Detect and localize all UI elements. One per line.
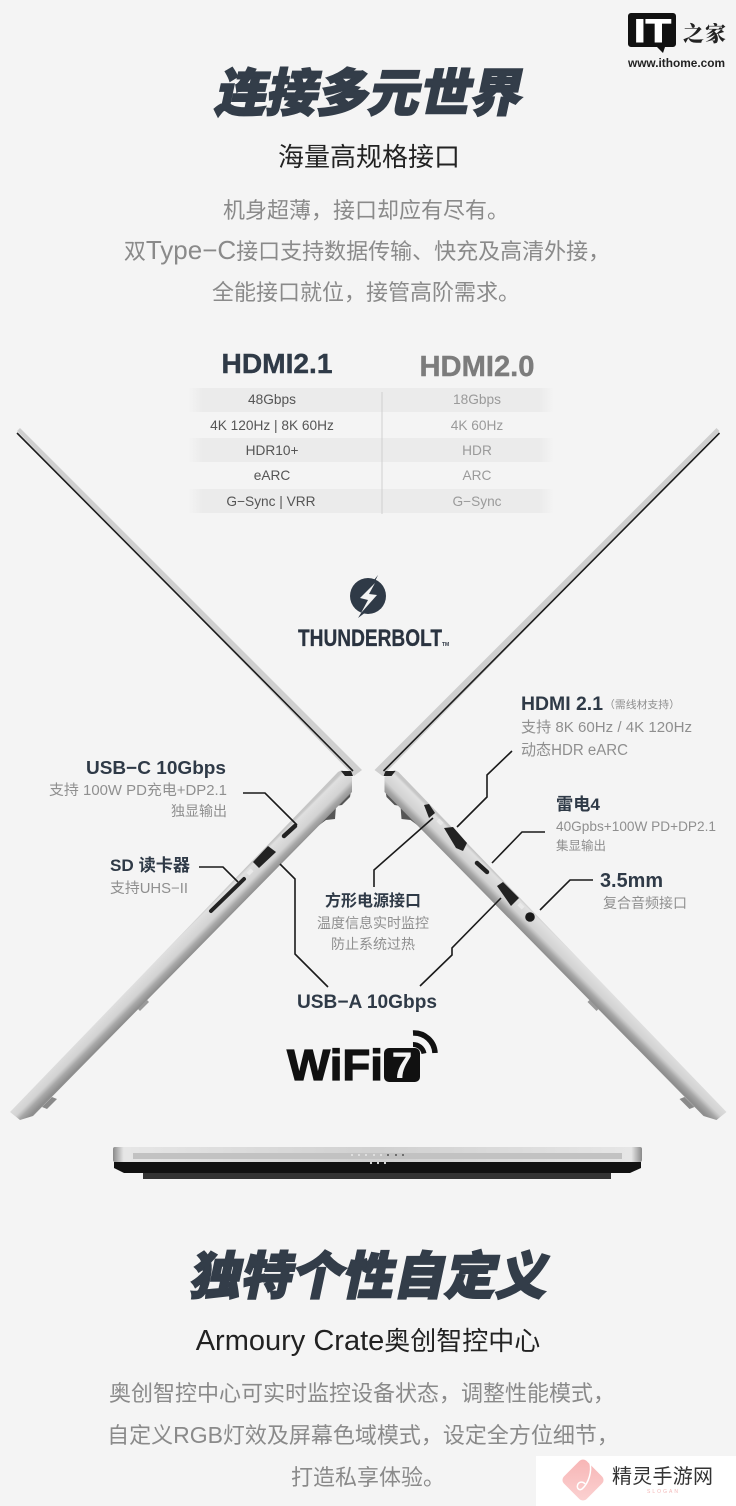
ports: right side bbox=[424, 804, 535, 922]
title: connect: 连接多元世界 bbox=[212, 65, 530, 122]
callout: HDMI 2.1: 动态HDR eARC bbox=[521, 742, 628, 759]
callout: USB-C: USB−C 10Gbps bbox=[86, 757, 226, 778]
comparison table: HDMI bbox=[188, 348, 554, 514]
callout: 3.5mm: 3.5mm bbox=[600, 870, 663, 892]
closing paragraph: 自定义RGB灯效及屏幕色域模式，设定全方位细节， bbox=[107, 1422, 619, 1448]
callout: USB-A: USB−A 10Gbps bbox=[297, 992, 437, 1013]
rows: HDMI 2.1 values bbox=[210, 392, 334, 509]
logo: Thunderbolt: THUNDERBOLT bbox=[298, 625, 442, 652]
rows: HDMI 2.0 values bbox=[451, 392, 503, 509]
intro paragraph: 机身超薄，接口却应有尽有。 bbox=[223, 198, 509, 223]
callout: 3.5mm bbox=[600, 870, 687, 911]
callout: Thunderbolt 4: 雷电4 bbox=[556, 795, 601, 814]
heading: HDMI2.1: HDMI2.1 bbox=[222, 348, 332, 379]
watermark: SLOGAN bbox=[647, 1489, 678, 1495]
callout: USB-C: 支持 100W PD充电+DP2.1 bbox=[49, 782, 227, 799]
logo: IT home bbox=[627, 13, 726, 70]
logo: WiFi 7: 7 bbox=[392, 1045, 412, 1086]
rows: HDMI 2.1 values: eARC bbox=[254, 468, 290, 483]
callout: HDMI 2.1: 支持 8K 60Hz / 4K 120Hz bbox=[521, 719, 692, 736]
callout: SD reader: SD 读卡器 bbox=[110, 856, 190, 875]
callout: SD reader bbox=[110, 856, 190, 897]
logo: WiFi 7: WiFi bbox=[287, 1041, 383, 1090]
subtitle: ports: 海量高规格接口 bbox=[278, 142, 460, 172]
callout: HDMI 2.1 bbox=[521, 693, 692, 759]
closing paragraph bbox=[107, 1381, 619, 1490]
callout: square power bbox=[317, 891, 429, 952]
watermark bbox=[536, 1456, 736, 1506]
leader lines bbox=[199, 751, 593, 987]
callout: square power: 温度信息实时监控 bbox=[317, 915, 429, 931]
heading: HDMI2.0: HDMI2.0 bbox=[420, 351, 534, 383]
rows: HDMI 2.1 values: 4K 120Hz | 8K 60Hz bbox=[210, 418, 334, 433]
logo: IT home: IT bbox=[634, 13, 672, 49]
watermark: 精灵手游网 bbox=[612, 1465, 713, 1488]
callout: Thunderbolt 4 bbox=[556, 795, 716, 853]
callout: SD reader: 支持UHS−II bbox=[110, 880, 188, 897]
callout: Thunderbolt 4: 集显输出 bbox=[556, 838, 606, 853]
logo: Thunderbolt bbox=[298, 575, 449, 652]
callout: HDMI 2.1: （需线材支持） bbox=[604, 698, 680, 711]
laptop: right profile bbox=[374, 428, 726, 1120]
callout: square power: 方形电源接口 bbox=[325, 891, 421, 910]
intro paragraph bbox=[124, 198, 610, 305]
logo: IT home: www.ithome.com bbox=[627, 56, 725, 70]
callout: USB-C bbox=[49, 757, 227, 819]
rows: HDMI 2.0 values: 4K 60Hz bbox=[451, 418, 503, 433]
ports: left side bbox=[211, 826, 295, 911]
subtitle: Armoury Crate: Armoury Crate奥创智控中心 bbox=[196, 1325, 540, 1357]
rows: HDMI 2.1 values: HDR10+ bbox=[246, 443, 298, 458]
intro paragraph: 双Type−C接口支持数据传输、快充及高清外接， bbox=[124, 235, 610, 265]
rows: HDMI 2.1 values: 48Gbps bbox=[248, 392, 296, 407]
rows: HDMI 2.0 values: G−Sync bbox=[452, 494, 502, 509]
callout: 3.5mm: 复合音频接口 bbox=[603, 895, 687, 911]
rows: HDMI 2.1 values: G−Sync | VRR bbox=[226, 494, 316, 509]
callout: USB-C: 独显输出 bbox=[171, 803, 227, 819]
title: customize: 独特个性自定义 bbox=[186, 1248, 555, 1305]
rows: HDMI 2.0 values: HDR bbox=[462, 443, 492, 458]
intro paragraph: 全能接口就位，接管高阶需求。 bbox=[212, 280, 520, 305]
rows: HDMI 2.0 values: ARC bbox=[463, 468, 492, 483]
laptop: front view bbox=[113, 1147, 642, 1179]
logo: WiFi 7 bbox=[287, 1033, 435, 1090]
logo: Thunderbolt: TM bbox=[442, 642, 449, 648]
callout: Thunderbolt 4: 40Gpbs+100W PD+DP2.1 bbox=[556, 819, 716, 834]
rows: HDMI 2.0 values: 18Gbps bbox=[453, 392, 501, 407]
logo: IT home: 之家 bbox=[683, 18, 726, 48]
callout: HDMI 2.1: HDMI 2.1 bbox=[521, 693, 603, 715]
laptop: left profile bbox=[10, 428, 362, 1120]
callout: square power: 防止系统过热 bbox=[331, 936, 415, 952]
closing paragraph: 奥创智控中心可实时监控设备状态，调整性能模式， bbox=[109, 1381, 615, 1406]
closing paragraph: 打造私享体验。 bbox=[291, 1465, 445, 1490]
